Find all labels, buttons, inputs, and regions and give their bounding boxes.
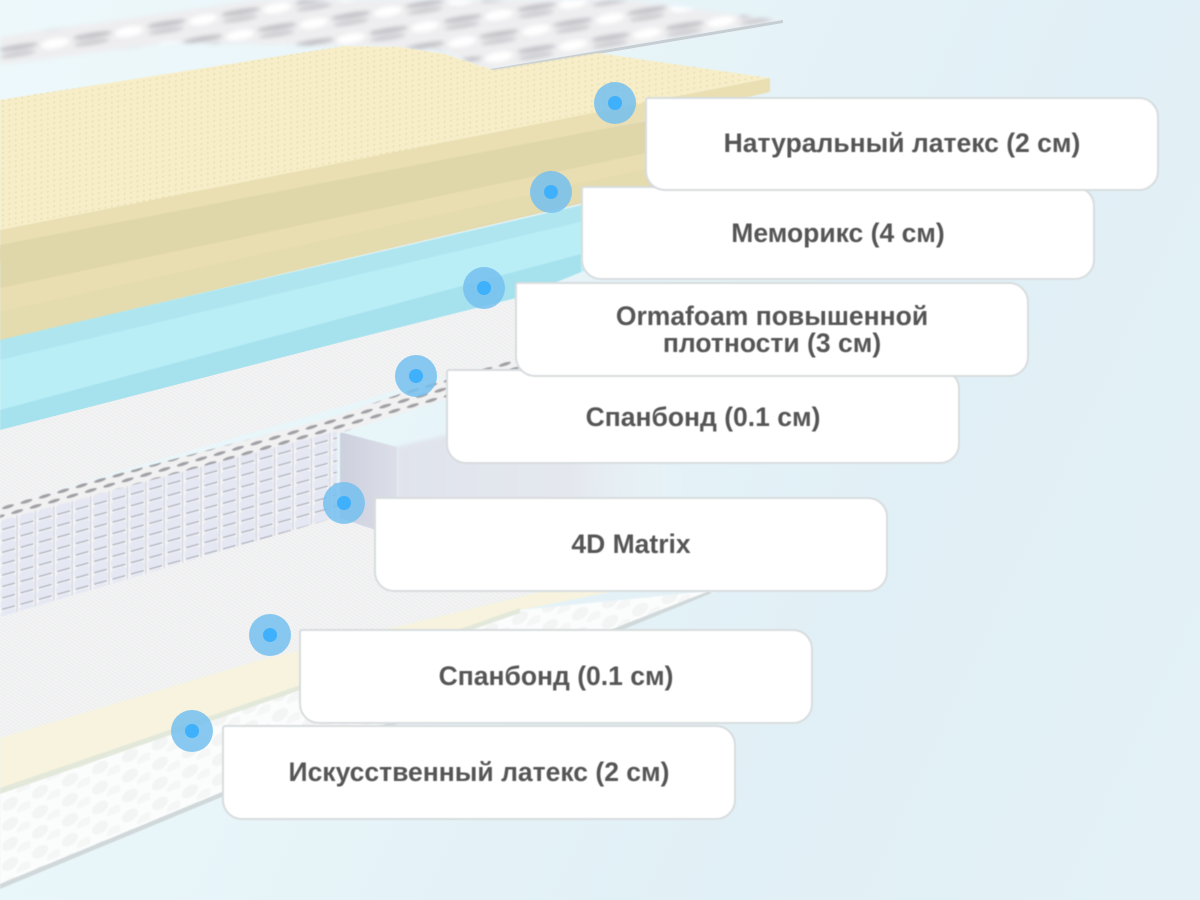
label: 4D Matrix: 4D Matrix (571, 529, 691, 559)
quilted top cover (0, 0, 783, 70)
layer: natural latex (0, 46, 770, 262)
label: Меморикс (581, 186, 1095, 280)
layer: lower spanbond (0, 517, 600, 738)
marker 6 (249, 614, 291, 656)
marker 2 (530, 171, 572, 213)
label: Спанбонд lower (299, 629, 813, 724)
layer: upper spanbond (0, 295, 530, 506)
layer: ormafoam (0, 185, 660, 432)
marker 5 (323, 482, 365, 524)
block end face (340, 432, 397, 530)
marker 1 (594, 82, 636, 124)
label: Спанбонд upper: Спанбонд (0.1 см) (586, 402, 820, 432)
label: Ormafoam: Ormafoam повышенной (616, 300, 928, 330)
label: 4D Matrix (374, 497, 888, 592)
label: Ormafoam (515, 282, 1029, 377)
layer: memorix (0, 118, 660, 342)
label: Натуральный латекс: Натуральный латекс (2 см) (724, 128, 1080, 158)
layer: artificial latex (0, 590, 720, 889)
quilted cover edge (490, 20, 783, 72)
marker 4 (395, 355, 437, 397)
label: Ormafoam: плотности (3 см) (663, 328, 881, 358)
label: Искусственный латекс: Искусственный латекс (2 см) (289, 757, 669, 787)
marker 7 (171, 710, 213, 752)
label: Спанбонд upper (446, 369, 960, 464)
layer: 4D Matrix springs (0, 360, 530, 617)
marker 3 (463, 267, 505, 309)
block side faces (397, 418, 690, 530)
label: Искусственный латекс (222, 725, 736, 820)
label: Меморикс: Меморикс (4 см) (731, 218, 945, 248)
label: Спанбонд lower: Спанбонд (0.1 см) (439, 661, 673, 691)
label: Натуральный латекс (645, 97, 1159, 191)
